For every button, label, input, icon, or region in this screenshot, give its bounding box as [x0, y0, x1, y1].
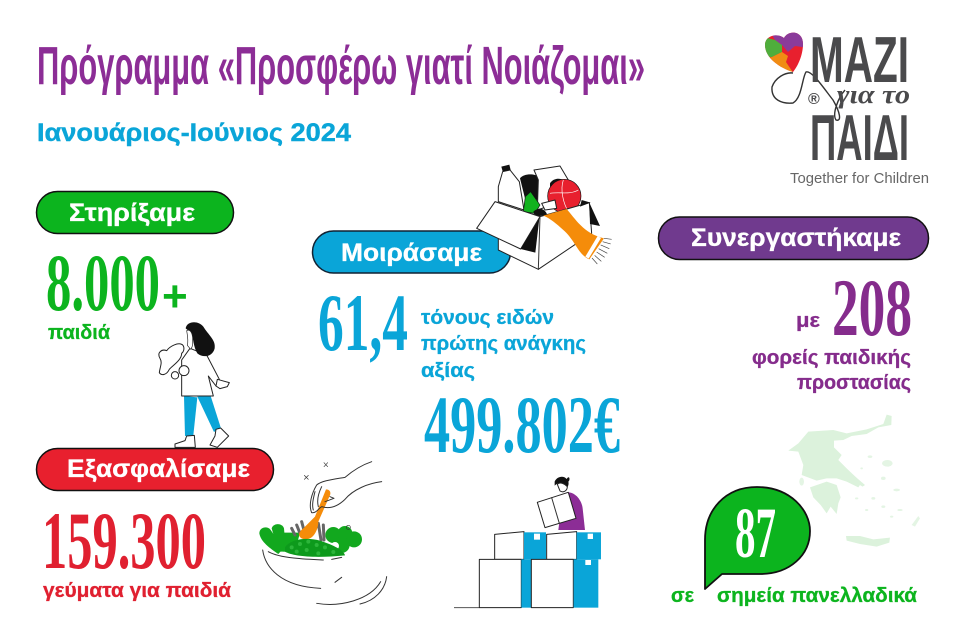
heading text: Μοιράσαμε [341, 239, 482, 267]
greens [259, 527, 283, 554]
mushrooms [292, 522, 324, 540]
panel: Synergastikame [658, 217, 928, 394]
heading pill [36, 192, 234, 234]
legs [184, 396, 197, 436]
heading pill [312, 231, 510, 273]
number: value in euros: 499.802€ [424, 379, 620, 470]
panel: Moirasame [312, 231, 620, 470]
Euboea [842, 468, 865, 487]
number: 8.000: 8.000 [46, 237, 160, 328]
paper roll [534, 166, 568, 210]
Islands [799, 455, 920, 527]
caption: se: σε [671, 585, 694, 607]
caption: tons: πρώτης ανάγκης [421, 333, 586, 355]
red ball [550, 179, 563, 187]
panel: Exasfalisame [36, 448, 274, 602]
box body [498, 203, 592, 269]
illustration: donation box [477, 165, 612, 269]
plus sign: + [162, 272, 188, 321]
number: 159.300: 159.300 [42, 495, 206, 586]
peas [285, 539, 345, 557]
upper boxes [495, 532, 524, 559]
heading text: Στηρίξαμε [69, 199, 195, 227]
broccoli [325, 526, 362, 553]
sparkles [304, 463, 328, 479]
caption [752, 347, 911, 394]
balloon string [772, 72, 845, 120]
illustration: girl with teddy bear [159, 322, 229, 447]
label: me: με [796, 310, 821, 332]
bowl [263, 550, 387, 604]
caption: tons: τόνους ειδών [421, 307, 554, 329]
orange scarf [543, 209, 604, 259]
ground line [454, 606, 479, 609]
person [558, 492, 585, 530]
lower boxes [479, 559, 521, 608]
registered mark: ® [808, 91, 820, 108]
number: 87: 87 [735, 493, 776, 573]
heading pill [36, 448, 274, 490]
icon: puzzle heart balloon [765, 32, 803, 72]
dark jar [520, 174, 538, 200]
heading pill [658, 217, 928, 260]
illustration: salad bowl [259, 462, 387, 604]
hair [186, 322, 215, 356]
logo tagline: Together for Children [790, 170, 929, 187]
spoon [299, 489, 330, 539]
Peloponnese [810, 482, 841, 514]
bottle [498, 170, 524, 210]
caption: tons [421, 307, 586, 382]
subtitle: period: Ιανουάριος-Ιούνιος 2024 [37, 119, 351, 147]
caption: φορείς παιδικής [752, 347, 911, 369]
caption: tons: αξίας [421, 360, 475, 382]
caption: παιδιά [48, 322, 111, 344]
illustration: person stacking boxes [454, 477, 601, 608]
map: Greece [788, 415, 920, 547]
speech bubble [705, 487, 810, 589]
number: 61,4: 61,4 [318, 277, 408, 368]
panel: 87 points [671, 487, 918, 607]
caption: γεύματα για παιδιά [43, 580, 232, 602]
Crete [846, 536, 890, 547]
panel: Stirixame [36, 192, 234, 344]
shirt [182, 348, 219, 396]
hand [310, 462, 382, 513]
logo word: gia to: για το [837, 80, 910, 109]
caption: προστασίας [797, 372, 911, 394]
number: 208: 208 [832, 262, 912, 353]
caption: points nationwide: σημεία πανελλαδικά [717, 585, 918, 607]
teddy bear [159, 344, 184, 375]
shoes [175, 435, 195, 447]
heading text: Εξασφαλίσαμε [67, 455, 250, 483]
mainland [788, 415, 892, 487]
logo: Mazi gia to Paidi [760, 23, 929, 187]
heading text: Συνεργαστήκαμε [691, 224, 901, 252]
green bottle [523, 192, 540, 213]
